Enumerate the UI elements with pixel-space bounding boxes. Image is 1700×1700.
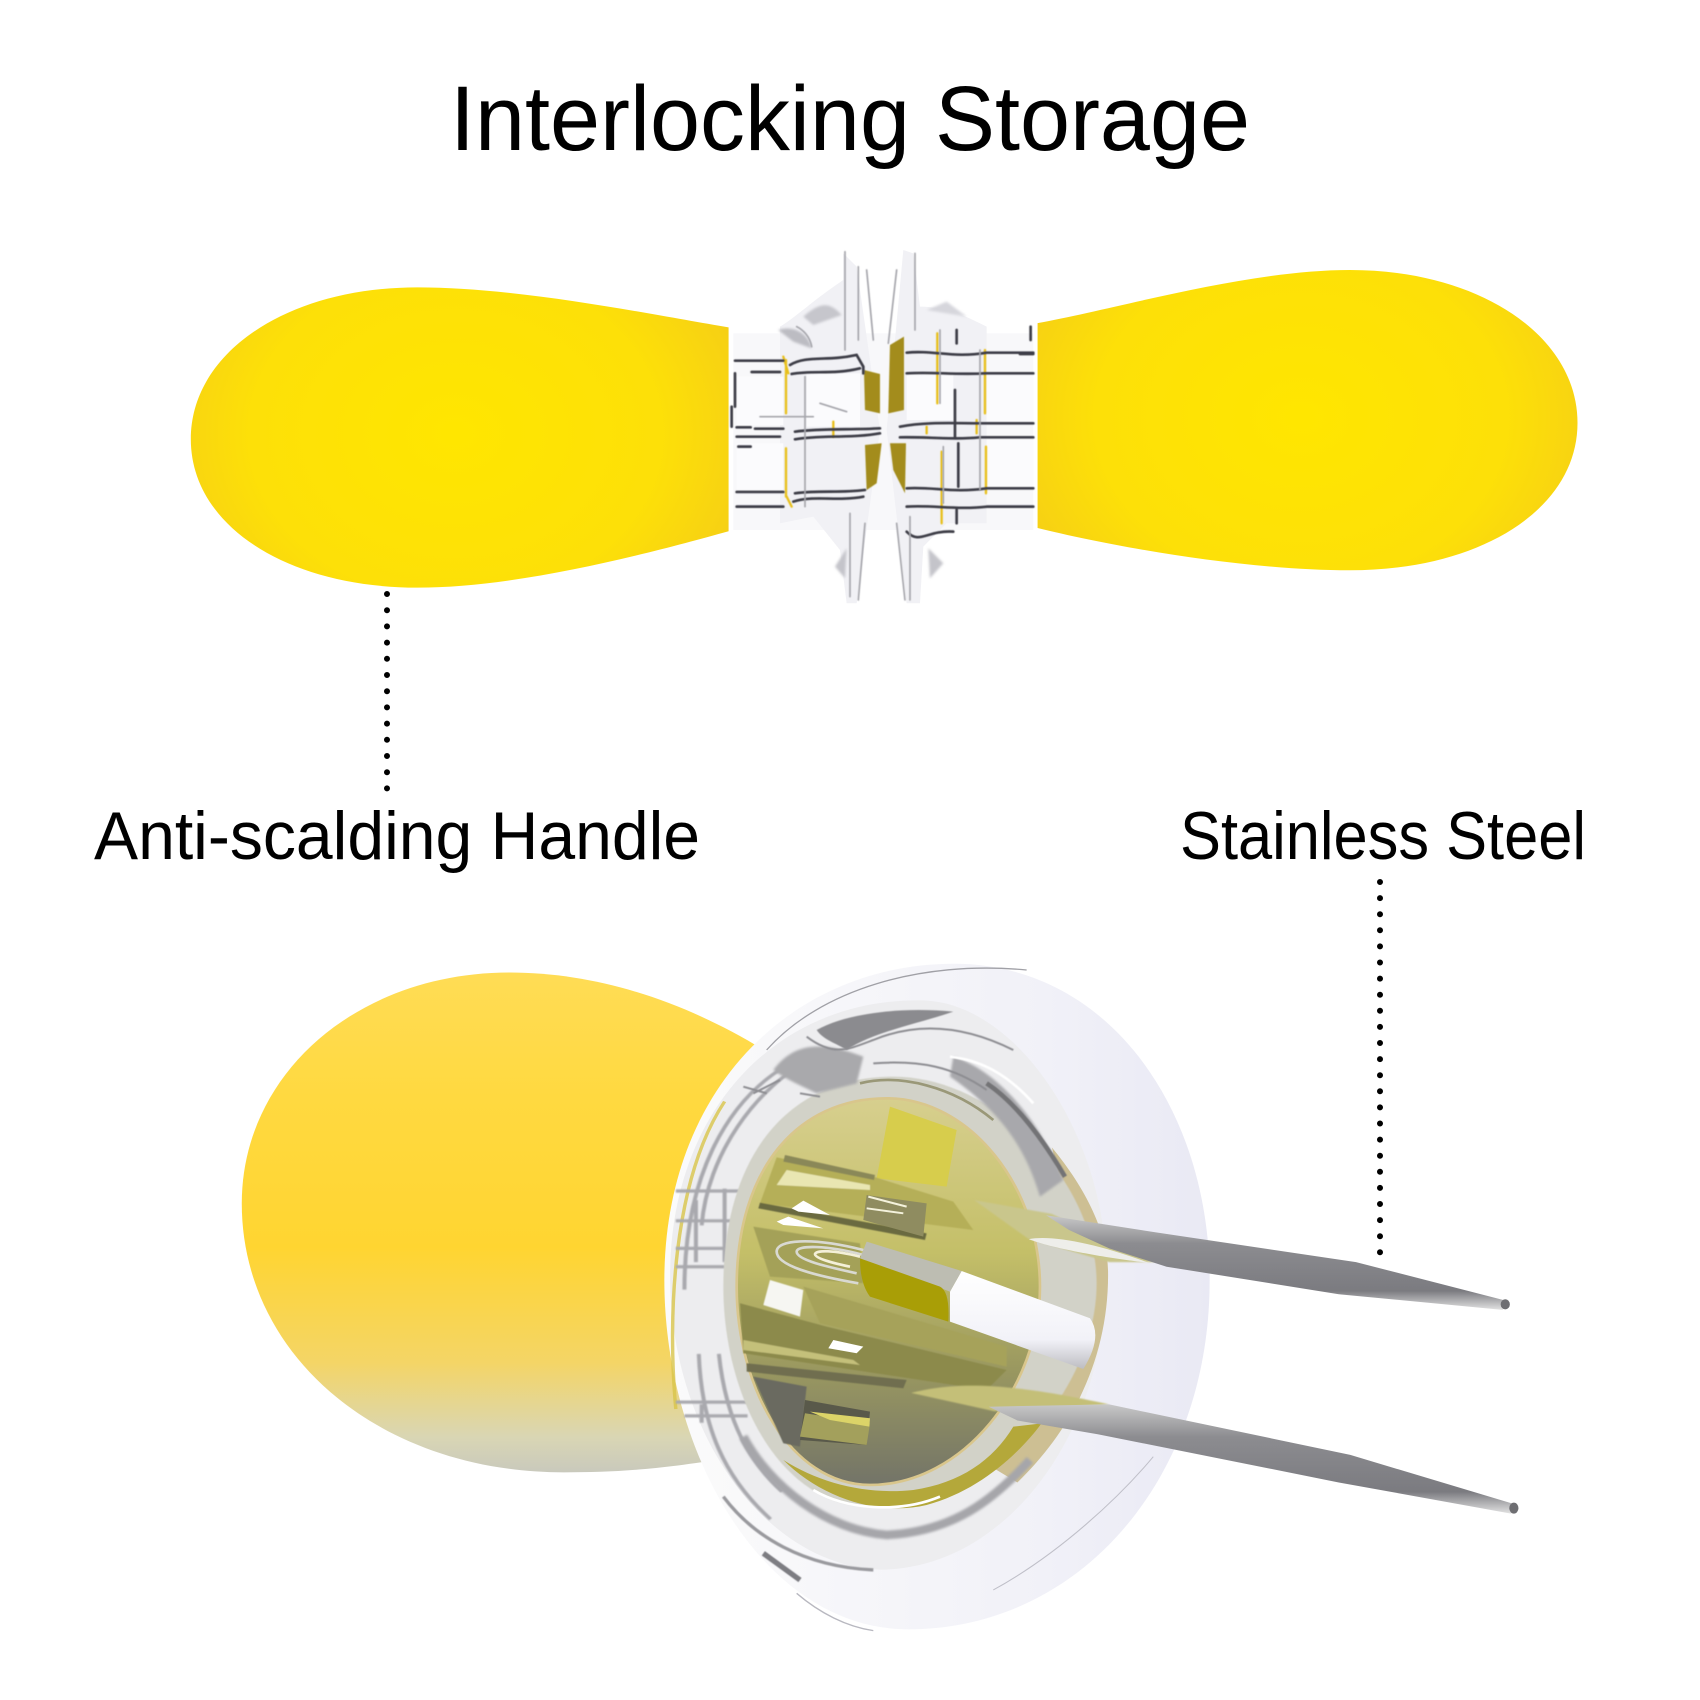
dotted leader: anti-scalding handle [384,594,390,790]
olive cavity with reflections [737,1098,1095,1485]
grey reflection block lower [800,1400,870,1445]
white reflection tiles [777,1201,863,1353]
streaks [740,1155,1007,1447]
label: stainless steel: Stainless Steel [1180,798,1586,874]
spiral reflection [777,1241,863,1283]
lower glass highlights and gold rim [723,1423,1153,1631]
yellow patch [877,1107,957,1187]
clear flange and ring [664,964,1210,1629]
clear interlocking connector [732,250,1033,603]
steel prong, lower [911,1386,1518,1514]
yellow handle, angled view [242,973,791,1472]
metal backing ring behind cavity [723,1077,1097,1507]
right yellow handle [1038,270,1578,570]
tan inner edge [994,1147,1108,1482]
interlocked corn holders, top illustration [191,250,1578,603]
label: anti-scalding handle: Anti-scalding Handle [94,798,700,874]
steel prongs [911,1200,1518,1514]
left yellow handle [191,287,729,588]
title: Interlocking Storage [450,68,1250,170]
upper glass highlights [743,968,1065,1197]
grey reflection block upper [863,1195,927,1237]
gold reflections [864,337,906,493]
yellow-tinted left edge [673,1101,725,1409]
ring lines [676,1056,816,1519]
steel prong, upper [974,1200,1510,1310]
cavity backing [737,1098,1040,1485]
dark refraction lines [732,327,1033,537]
outer clear flange [664,964,1210,1629]
single corn holder, bottom illustration [242,964,1518,1631]
central tab [860,1242,1095,1369]
dotted leader: stainless steel [1377,882,1383,1258]
glass ring [670,1000,1106,1570]
